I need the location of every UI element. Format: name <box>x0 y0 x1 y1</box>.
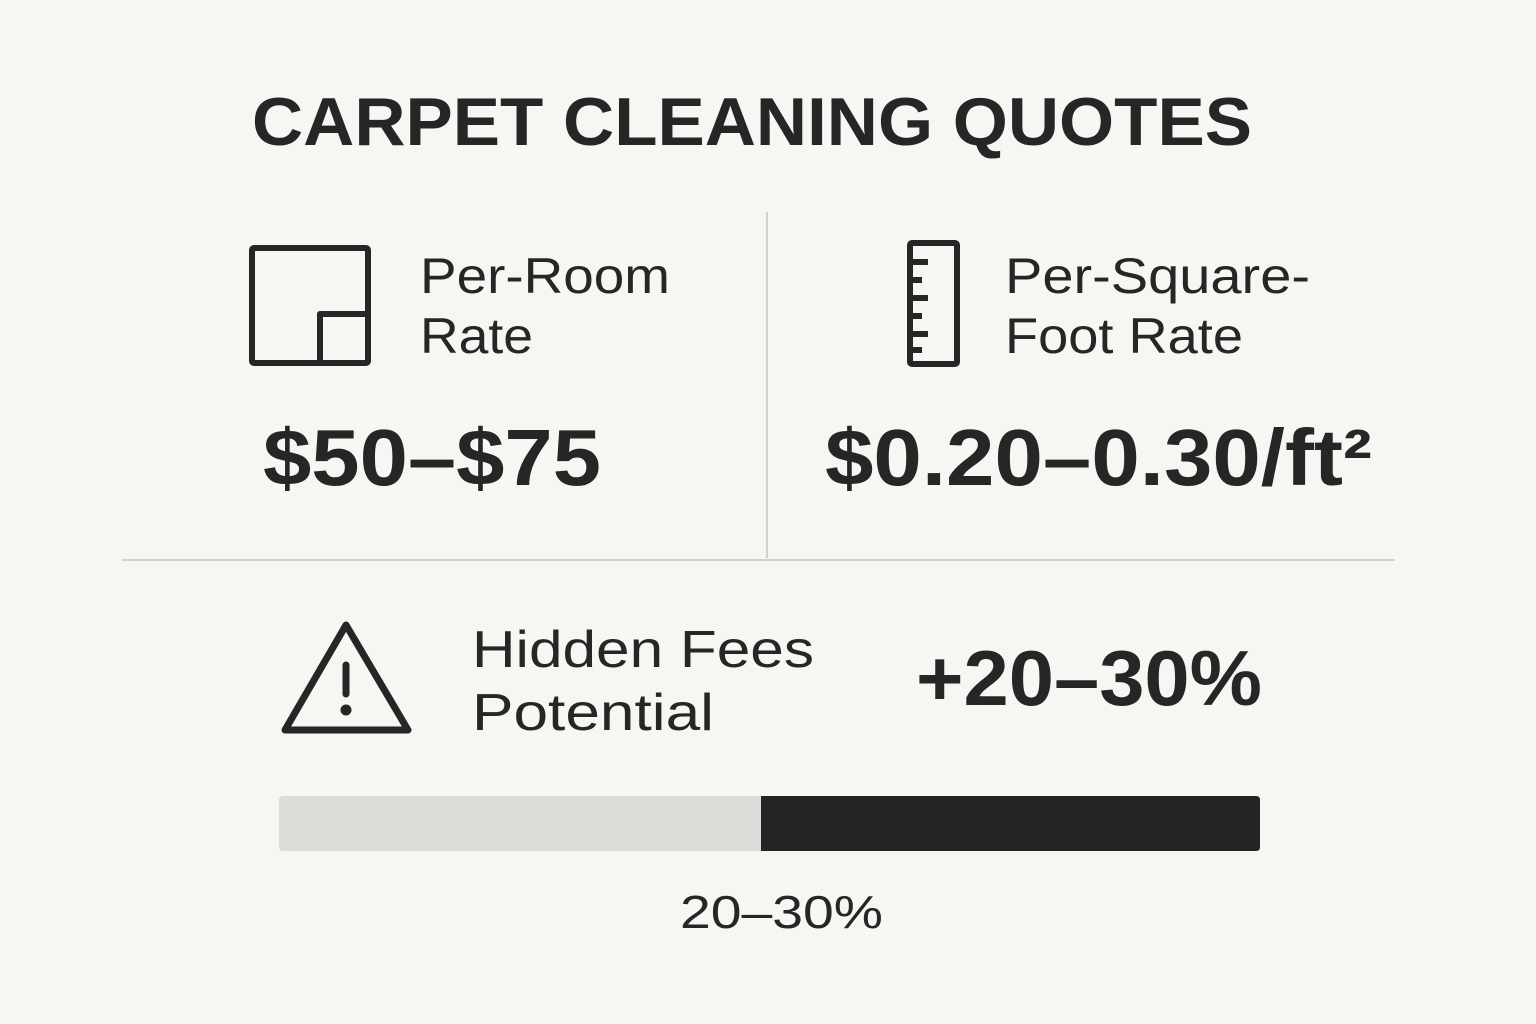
panel: per-room rate <box>252 248 670 502</box>
bar chart: hidden fee proportion <box>279 796 1260 851</box>
value: per-room price: $50–$75 <box>263 413 601 502</box>
icon: room floor plan <box>252 248 368 363</box>
value: hidden fee percentage: +20–30% <box>916 634 1262 722</box>
icon: ruler <box>910 243 957 364</box>
panel: per-room rate: Rate <box>420 308 533 364</box>
title: CARPET CLEANING QUOTES <box>252 84 1252 160</box>
panel: per-square-foot rate: Foot Rate <box>1005 308 1243 364</box>
bar label: 20–30% <box>680 886 883 938</box>
heading: hidden fees potential: Hidden Fees <box>472 621 814 679</box>
panel: hidden fees <box>279 621 1262 938</box>
panel: hidden fees: Potential <box>472 684 714 742</box>
value: per-square-foot price: $0.20–0.30/ft² <box>825 413 1372 502</box>
icon: warning triangle <box>285 625 408 730</box>
heading: per-room rate: Per-Room <box>420 248 670 304</box>
heading: per-square-foot rate: Per-Square- <box>1005 248 1310 304</box>
panel: per-square-foot rate <box>825 243 1372 502</box>
